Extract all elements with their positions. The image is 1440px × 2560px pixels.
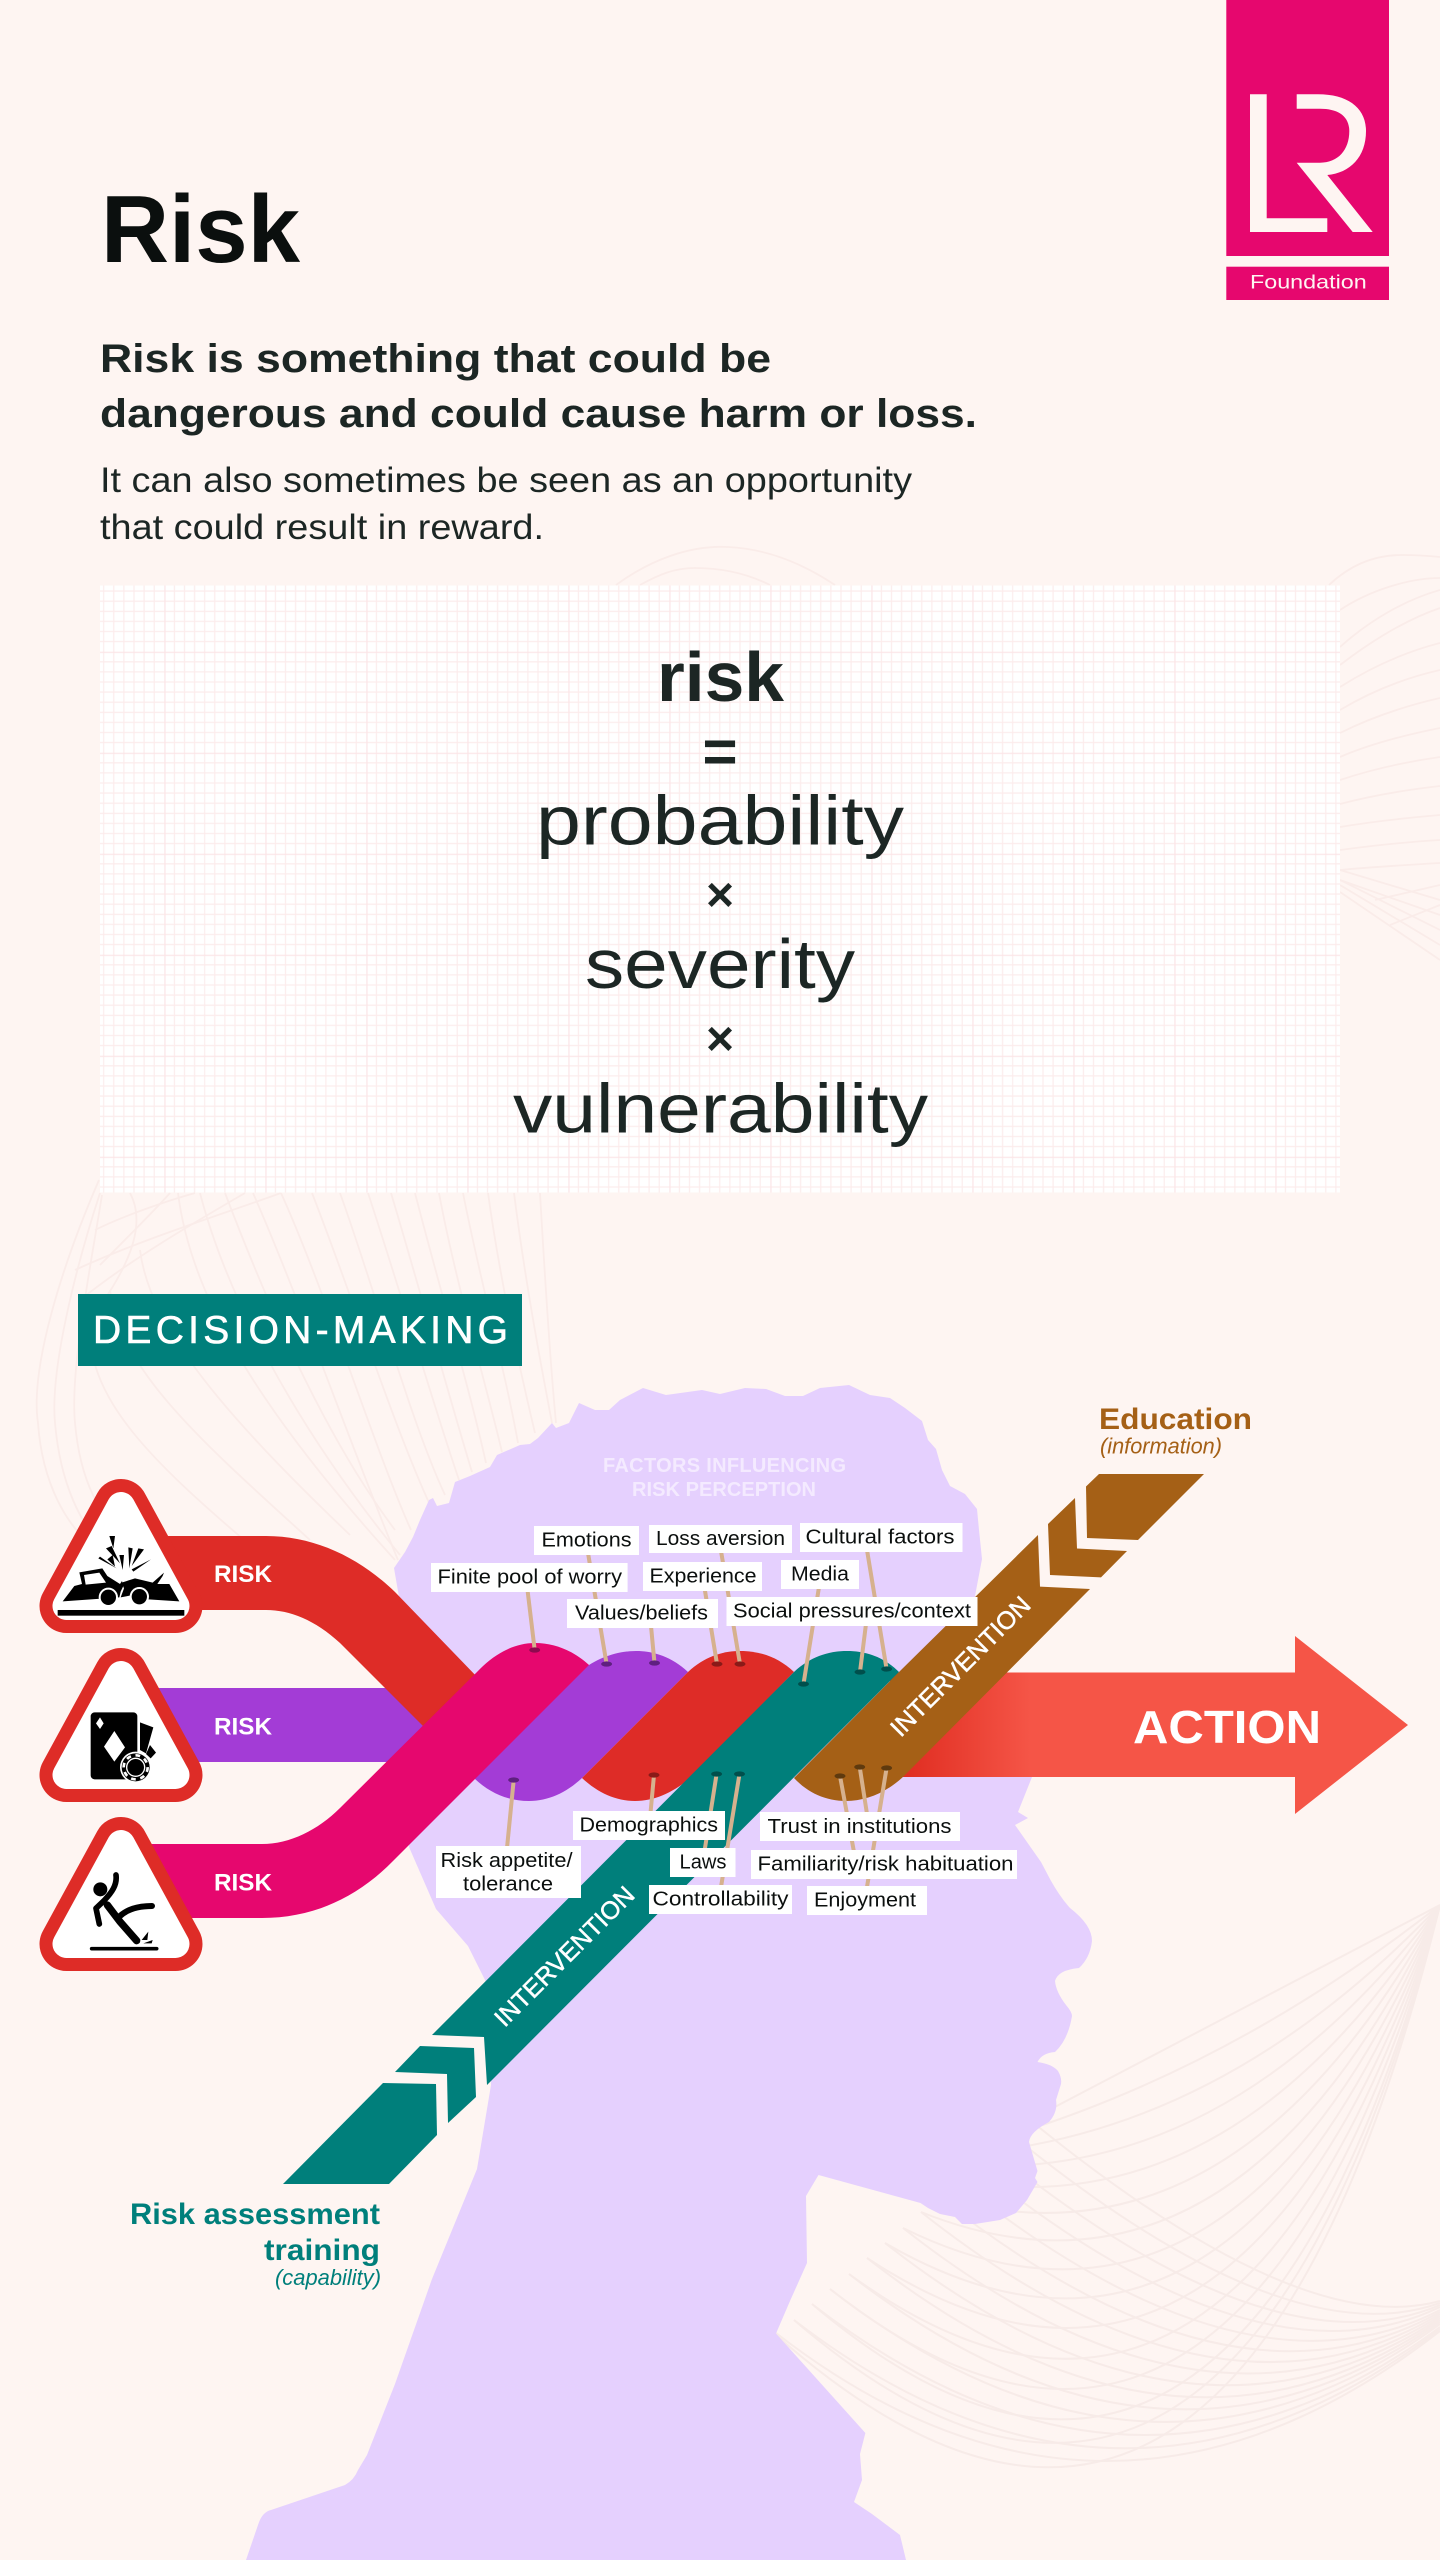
intro: opportunity text: [100, 461, 913, 547]
intervention arrow: brown: [794, 1474, 1204, 1801]
label: cultural factors: Cultural factors: [806, 1526, 954, 1548]
label: factors influencing risk perception: [603, 1455, 846, 1501]
risk band: purple: [120, 1651, 688, 1801]
label: values/beliefs: Values/beliefs: [575, 1602, 708, 1624]
risk band text labels: [214, 1561, 273, 1896]
logo: LR Foundation: Foundation: [1250, 273, 1367, 294]
label: values/beliefs: [567, 1599, 718, 1628]
risk band text labels: RISK: [214, 1561, 273, 1588]
intro: bold definition: Risk is something that could be: [100, 337, 771, 381]
label: education: [1099, 1403, 1252, 1458]
label: finite pool of worry: [431, 1563, 628, 1592]
label: risk appetite/tolerance: [436, 1846, 581, 1898]
heading: decision-making: [78, 1294, 522, 1366]
formula: vulnerability: vulnerability: [513, 1070, 928, 1148]
arrow: action: [890, 1636, 1408, 1814]
label: factors influencing risk perception: RISK PERCEPTION: [632, 1479, 816, 1501]
label: experience: Experience: [650, 1566, 756, 1588]
label: social pressures/context: Social pressures/context: [733, 1600, 971, 1622]
intro: bold definition: [100, 337, 977, 436]
label: media: Media: [791, 1564, 850, 1586]
label: risk assessment training: [130, 2198, 381, 2290]
panel: risk formula on graph paper: [100, 586, 1340, 1192]
label: risk assessment training: Risk assessment: [130, 2198, 380, 2231]
intro: opportunity text: that could result in reward.: [100, 508, 544, 547]
thread anchor dots: [508, 1647, 892, 1783]
title: Risk: [101, 176, 301, 283]
factor labels: [431, 1523, 1017, 1915]
head silhouette: [246, 1385, 1092, 2560]
formula: risk: risk: [657, 638, 784, 716]
label: familiarity/risk habituation: [751, 1850, 1017, 1879]
intervention arrow: brown: INTERVENTION: [885, 1591, 1036, 1742]
formula: times: ×: [706, 869, 734, 922]
intro: bold definition: dangerous and could cause harm or loss.: [100, 392, 977, 436]
formula: times: ×: [706, 1013, 734, 1066]
label: cultural factors: [800, 1523, 962, 1552]
label: loss aversion: [649, 1525, 792, 1553]
label: familiarity/risk habituation: Familiarity/risk habituation: [758, 1854, 1014, 1876]
formula: equals: =: [702, 718, 738, 785]
label: risk appetite/tolerance: Risk appetite/: [440, 1850, 573, 1872]
label: risk assessment training: training: [264, 2234, 380, 2267]
label: education: Education: [1099, 1403, 1252, 1436]
connecting threads: [507, 1550, 887, 1887]
label: factors influencing risk perception: FACTORS INFLUENCING: [603, 1455, 846, 1477]
label: laws: [670, 1848, 736, 1877]
label: demographics: Demographics: [580, 1814, 718, 1836]
intervention arrow: teal: [283, 1651, 899, 2184]
label: demographics: [573, 1811, 725, 1840]
label: emotions: Emotions: [542, 1530, 632, 1552]
intro: opportunity text: It can also sometimes be seen as an opportunity: [100, 461, 913, 500]
risk band text labels: RISK: [214, 1870, 273, 1896]
formula: severity: severity: [585, 925, 855, 1003]
label: risk appetite/tolerance: tolerance: [463, 1874, 553, 1896]
label: emotions: [534, 1526, 639, 1555]
logo: LR Foundation: [1226, 0, 1389, 300]
label: loss aversion: Loss aversion: [656, 1528, 785, 1550]
label: controllability: [649, 1885, 792, 1914]
risk band text labels: RISK: [214, 1714, 273, 1740]
label: enjoyment: Enjoyment: [814, 1890, 916, 1912]
risk band: pink: [120, 1643, 589, 1918]
label: social pressures/context: [726, 1597, 978, 1626]
label: trust in institutions: [760, 1812, 960, 1841]
risk band: red: [120, 1536, 794, 1801]
label: finite pool of worry: Finite pool of worry: [438, 1566, 622, 1588]
label: controllability: Controllability: [652, 1888, 788, 1910]
arrow: action: ACTION: [1133, 1701, 1321, 1753]
intervention arrow: teal: INTERVENTION: [489, 1881, 640, 2032]
label: laws: Laws: [680, 1852, 726, 1874]
icon: car crash warning triangle: [58, 1506, 184, 1616]
icon: falling person warning triangle: [66, 1844, 176, 1949]
formula: probability: probability: [536, 782, 904, 860]
label: trust in institutions: Trust in institutions: [768, 1816, 952, 1838]
label: education: (information): [1100, 1434, 1222, 1458]
label: media: [781, 1560, 859, 1589]
label: experience: [643, 1562, 762, 1591]
icon: gambling cards warning triangle: [66, 1675, 176, 1783]
heading: decision-making: DECISION-MAKING: [93, 1309, 508, 1352]
label: risk assessment training: (capability): [275, 2265, 381, 2290]
label: enjoyment: [807, 1886, 927, 1915]
